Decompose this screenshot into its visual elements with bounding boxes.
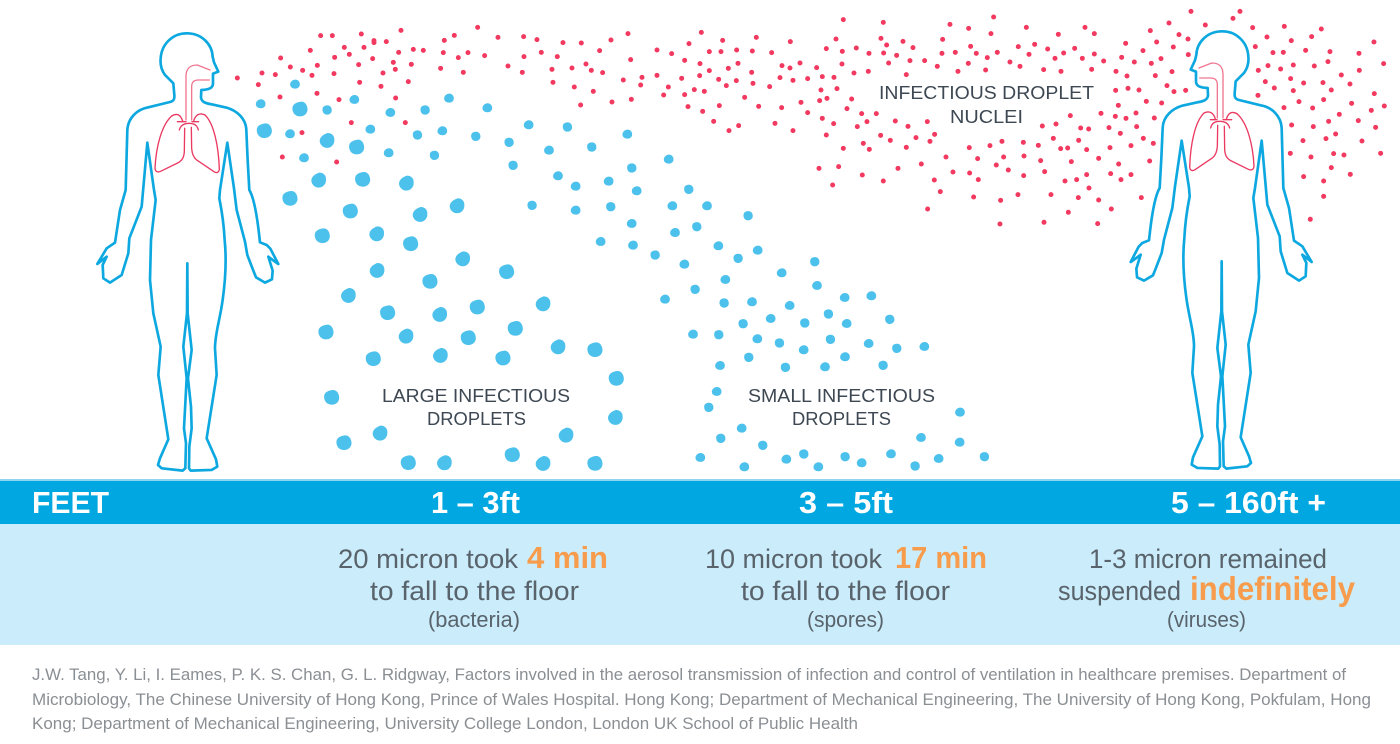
column: 1-3 ft large droplets <box>338 540 608 632</box>
column: 3-5 ft small droplets: 10 micron took <box>705 544 882 574</box>
label: small infectious droplets <box>748 385 935 429</box>
label: small infectious droplets: SMALL INFECTIOUS <box>748 385 935 406</box>
column: 3-5 ft small droplets: to fall to the floor <box>741 576 950 606</box>
column: 1-3 ft large droplets: 20 micron took <box>338 544 518 574</box>
distance bar headings: 5 – 160ft + <box>1171 485 1326 520</box>
distance bar <box>0 479 1400 524</box>
label: small infectious droplets: DROPLETS <box>792 408 891 429</box>
source citation: J.W. Tang, Y. Li, I. Eames, P. K. S. Chan, G. L. Ridgway, Factors involved in the aerosol transmission of infection and control of ventilation in healthcare premises. Department of <box>32 666 1346 684</box>
column: 3-5 ft small droplets: (spores) <box>807 607 884 632</box>
column: 5-160 ft nuclei: suspended <box>1058 576 1181 606</box>
distance bar headings: 3 – 5ft <box>799 485 893 520</box>
column: 5-160 ft nuclei <box>1058 544 1356 632</box>
label: infectious droplet nuclei <box>879 82 1094 127</box>
column: 3-5 ft small droplets: 17 min <box>895 540 987 575</box>
left human figure with lungs <box>97 33 278 471</box>
distance bar headings: FEET <box>32 485 109 520</box>
label: large infectious droplets: LARGE INFECTIOUS <box>382 385 570 406</box>
large infectious droplets cluster <box>256 80 624 471</box>
source citation <box>32 666 1371 733</box>
column: 1-3 ft large droplets: 4 min <box>527 540 608 575</box>
airborne droplet nuclei cloud <box>237 11 1384 224</box>
column: 3-5 ft small droplets <box>705 540 987 632</box>
column: 5-160 ft nuclei: (viruses) <box>1167 607 1246 632</box>
column: 1-3 ft large droplets: (bacteria) <box>428 607 520 632</box>
right human figure with lungs <box>1131 31 1312 469</box>
column: 1-3 ft large droplets: to fall to the floor <box>370 576 579 606</box>
source citation: Microbiology, The Chinese University of Hong Kong, Prince of Wales Hospital. Hong Kong; Department of Mechanical Engineering, The University of Hong Kong, Pokfulam, Hong <box>32 691 1371 709</box>
small infectious droplets cluster <box>384 94 989 471</box>
fall time panel <box>0 524 1400 645</box>
distance bar headings: 1 – 3ft <box>431 485 520 520</box>
column: 5-160 ft nuclei: 1-3 micron remained <box>1089 544 1327 574</box>
label: large infectious droplets: DROPLETS <box>427 408 526 429</box>
column: 5-160 ft nuclei: indefinitely <box>1190 570 1356 607</box>
label: infectious droplet nuclei: NUCLEI <box>950 106 1023 127</box>
source citation: Kong; Department of Mechanical Engineering, University College London, London UK School of Public Health <box>32 715 858 733</box>
label: infectious droplet nuclei: INFECTIOUS DROPLET <box>879 82 1094 103</box>
label: large infectious droplets <box>382 385 570 429</box>
distance bar headings <box>32 485 1326 520</box>
